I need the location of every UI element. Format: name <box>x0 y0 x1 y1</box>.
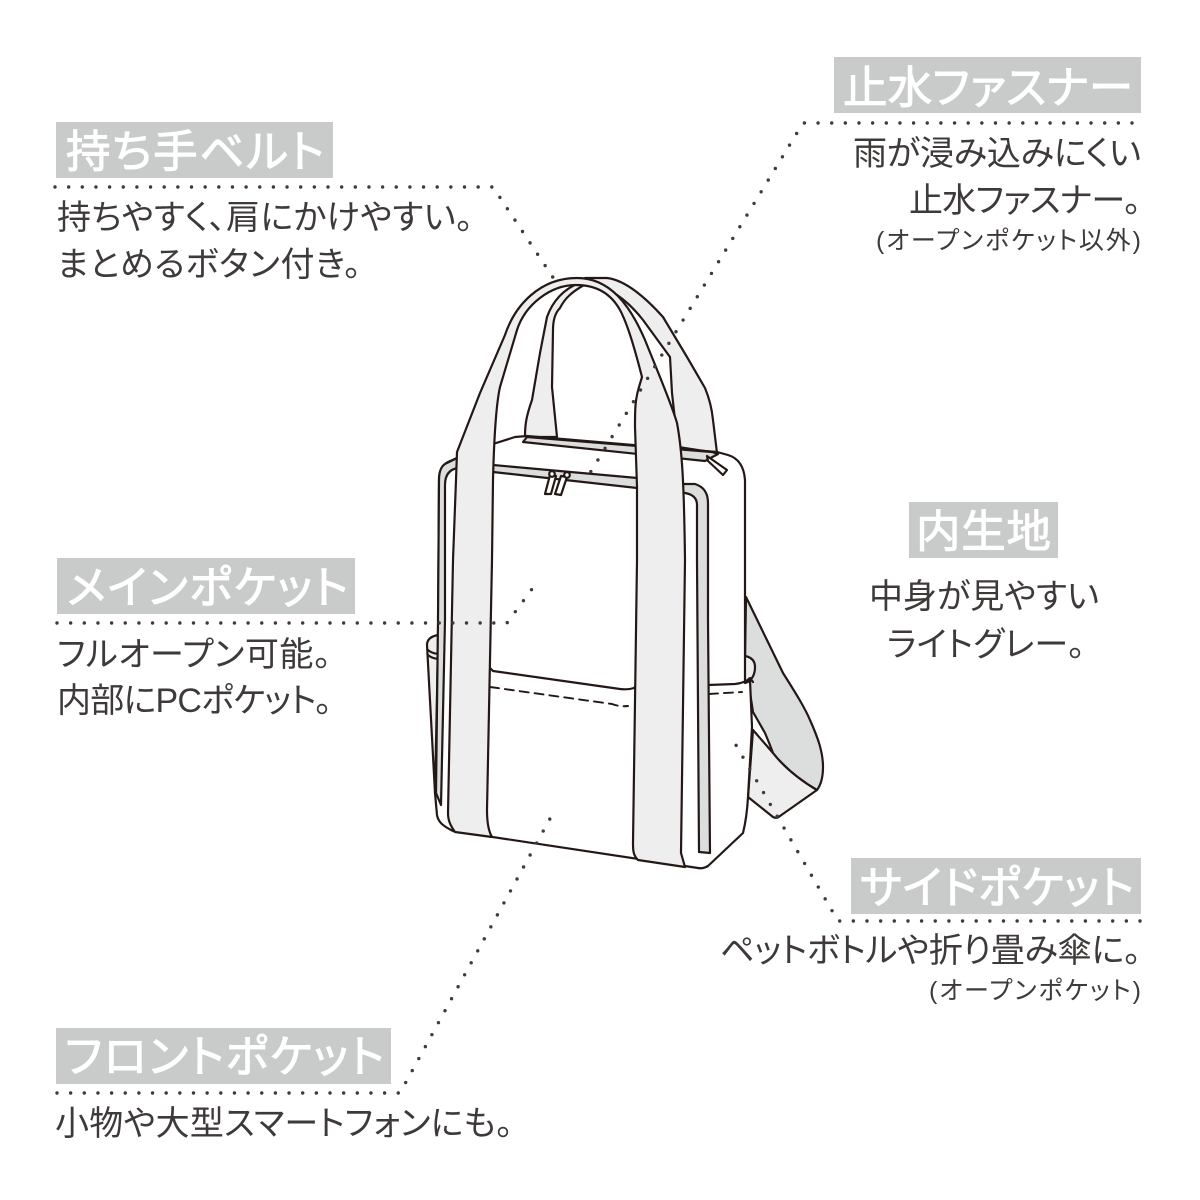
label: water-stop zipper: 止水ファスナー <box>843 64 1133 113</box>
text: side pocket description: (オープンポケット) <box>929 977 1141 1005</box>
back handle <box>525 278 717 453</box>
main pocket zipper band <box>436 458 710 853</box>
callout line: handle belt <box>55 187 556 282</box>
text: main pocket description: 内部にPCポケット。 <box>57 682 332 720</box>
text: front pocket description: 小物や大型スマートフォンにも。 <box>55 1105 513 1143</box>
text: lining description: 中身が見やすい <box>869 578 1099 616</box>
front pocket <box>490 668 637 706</box>
top zipper <box>523 437 727 475</box>
callout line: water-stop zipper <box>590 123 1132 473</box>
zipper pulls <box>545 471 570 495</box>
illustration: tote bag <box>427 278 823 868</box>
text: handle belt description: まとめるボタン付き。 <box>57 246 361 284</box>
text: side pocket description <box>720 932 1141 1005</box>
text: main pocket description: フルオープン可能。 <box>57 636 331 674</box>
text: main pocket description <box>57 636 332 720</box>
right side pocket <box>708 656 755 694</box>
shoulder strap <box>745 597 823 818</box>
label: front pocket: フロントポケット <box>65 1033 384 1082</box>
text: water-stop zipper description: (オープンポケット以外) <box>876 227 1141 255</box>
text: water-stop zipper description <box>853 135 1141 255</box>
callout line: main pocket <box>57 589 532 623</box>
text: lining description <box>869 578 1099 664</box>
text: handle belt description <box>57 199 473 284</box>
front handle <box>448 278 685 867</box>
label: side pocket: サイドポケット <box>860 864 1134 913</box>
text: side pocket description: ペットボトルや折り畳み傘に。 <box>720 932 1141 970</box>
label: lining: 内生地 <box>916 508 1051 557</box>
label: handle belt: 持ち手ベルト <box>66 128 324 177</box>
text: handle belt description: 持ちやすく、肩にかけやすい。 <box>57 199 473 237</box>
left side pocket <box>427 635 441 805</box>
label: main pocket: メインポケット <box>67 564 348 613</box>
text: water-stop zipper description: 止水ファスナー。 <box>909 182 1141 220</box>
callout line: side pocket <box>733 740 1140 921</box>
text: lining description: ライトグレー。 <box>887 626 1085 664</box>
callout line: front pocket <box>57 815 552 1093</box>
bag body <box>435 436 755 868</box>
text: water-stop zipper description: 雨が浸み込みにくい <box>853 135 1141 173</box>
